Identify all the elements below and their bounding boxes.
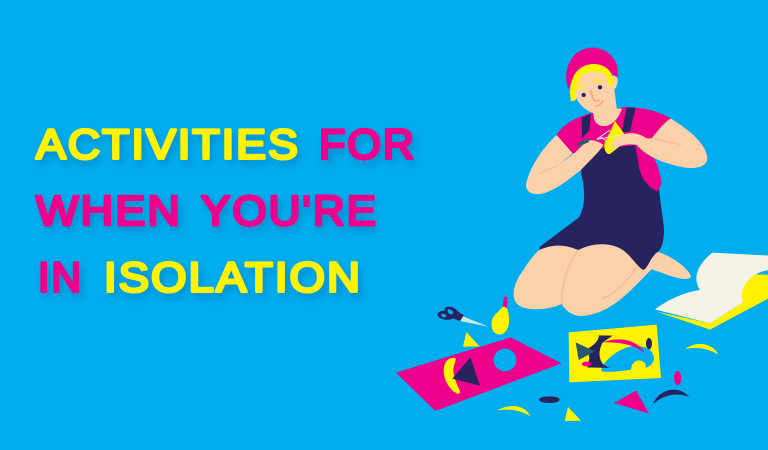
- title: YOU'RE: [201, 187, 378, 234]
- person: shirt: [557, 107, 671, 153]
- craft: yellow crescent: [444, 358, 460, 394]
- craft: navy oval: [539, 396, 560, 403]
- craft: magenta sliver: [603, 339, 645, 353]
- person: overall straps: [582, 108, 636, 138]
- title: WHEN: [36, 187, 182, 234]
- illustration: open book: [655, 253, 768, 330]
- title: FOR: [319, 120, 416, 168]
- person: head: [574, 71, 618, 114]
- person: nose and mouth: [591, 91, 603, 106]
- craft: teal triangle: [576, 342, 595, 360]
- title: IN: [38, 254, 83, 300]
- person: upper body: [526, 48, 707, 222]
- person: eyes: [581, 93, 586, 97]
- person: overalls: [575, 143, 663, 222]
- craft: navy oval: [646, 338, 652, 349]
- person: hair: [570, 64, 613, 101]
- craft: paper cut-out hole: [602, 346, 654, 372]
- craft: yellow sliver: [497, 406, 530, 416]
- craft: yellow triangle: [463, 332, 480, 347]
- illustration: kneeling person: [514, 48, 707, 316]
- craft: round hole: [494, 349, 516, 371]
- craft: scissor blade: [460, 316, 488, 327]
- person: left arm: [526, 135, 603, 194]
- craft: magenta oval: [582, 362, 592, 366]
- craft: magenta triangle: [614, 391, 649, 414]
- craft: navy crescent: [653, 390, 689, 404]
- craft: glue bottle: [502, 296, 507, 309]
- craft: scissors, glue and cut paper: [396, 296, 561, 416]
- title: [36, 120, 416, 300]
- craft: magenta drop: [674, 371, 681, 385]
- person: scissors in hand: [579, 141, 587, 144]
- craft: navy triangle: [452, 357, 480, 386]
- craft: yellow paper with cut-out: [569, 325, 661, 382]
- person: paper in hand: [604, 121, 624, 154]
- person: lower body and legs: [514, 170, 691, 316]
- craft: scissor handles: [438, 307, 464, 321]
- title: ACTIVITIES: [36, 120, 300, 168]
- title: ISOLATION: [104, 254, 362, 300]
- person: eyebrows: [578, 80, 600, 89]
- craft: yellow sliver right: [685, 344, 718, 355]
- person: right arm: [611, 118, 707, 168]
- person: neck and chest: [593, 83, 622, 126]
- craft: magenta paper with cut-outs: [396, 337, 561, 411]
- craft: navy cut shape: [587, 335, 613, 368]
- craft: yellow paper and scattered shapes: [565, 325, 718, 421]
- craft: small yellow half circle: [631, 360, 646, 370]
- craft: small yellow triangle: [565, 407, 581, 421]
- person: hat: [566, 48, 618, 89]
- person: shirt back: [635, 143, 662, 192]
